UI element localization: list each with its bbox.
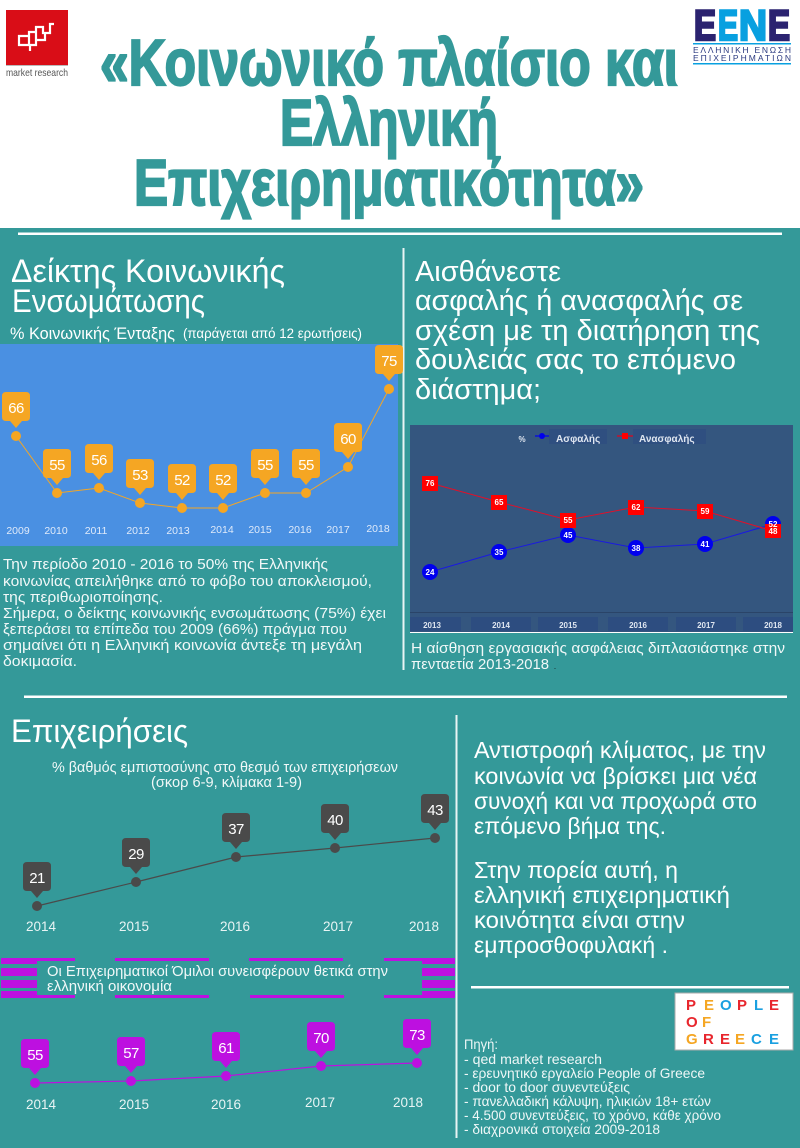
line chart: social inclusion 2009-2018: 2011: [85, 525, 107, 537]
text block: source: - qed market research: [464, 1051, 602, 1067]
line chart: secure vs insecure: 24: [426, 568, 435, 577]
text block: climate reversal: επόμενο βήμα της.: [474, 813, 666, 839]
legend: Ανασφαλής: [639, 434, 695, 445]
text block: source: - διαχρονικά στοιχεία 2009-2018: [464, 1121, 660, 1137]
line chart: business groups 2014-2018: 73: [409, 1027, 425, 1044]
logo: EENE: [693, 2, 791, 64]
line chart: trust 2014-2018: 21: [29, 870, 45, 887]
line chart: business groups 2014-2018: 2017: [305, 1095, 335, 1110]
line chart: social inclusion 2009-2018: 55: [298, 457, 314, 474]
line chart: secure vs insecure: 2018: [764, 621, 782, 630]
text block: climate reversal: Αντιστροφή κλίματος, με την: [474, 737, 766, 763]
logo: People of Greece: O: [686, 1014, 698, 1031]
text block: source: - 4.500 συνεντεύξεις, το χρόνο, κάθε χρόνο: [464, 1107, 721, 1123]
chart subtitle: trust in businesses: [52, 759, 398, 791]
line chart: secure vs insecure: 62: [632, 503, 641, 512]
line chart: secure vs insecure: 38: [632, 544, 641, 553]
logo: People of Greece: E: [735, 1031, 745, 1048]
text block: climate reversal: [474, 737, 766, 958]
logo: People of Greece: O: [720, 997, 732, 1014]
line chart: trust 2014-2018: 2017: [323, 919, 353, 934]
line chart: trust 2014-2018: 40: [327, 812, 343, 829]
line chart: social inclusion 2009-2018: 2009: [6, 525, 30, 537]
title: Επιχειρηματικότητα»: [134, 146, 644, 219]
line chart: social inclusion 2009-2018: 52: [215, 472, 231, 489]
banner: business groups: [1, 958, 455, 998]
logo: EENE: Ν: [739, 2, 767, 50]
text block: social inclusion commentary: ξεπεράσει τα επίπεδα του 2009 (66%) πράγμα που: [3, 621, 347, 638]
caption: job security: [411, 640, 785, 673]
line chart: secure vs insecure: 2017: [697, 621, 715, 630]
caption: job security: .: [554, 662, 556, 671]
logo: People of Greece: G: [686, 1031, 698, 1048]
heading: job security question: Αισθάνεστε: [415, 256, 561, 288]
text block: source: - πανελλαδική κάλυψη, ηλικιών 18+ ετών: [464, 1093, 711, 1109]
line chart: social inclusion 2009-2018: 56: [91, 452, 107, 469]
line chart: trust 2014-2018: 2018: [409, 919, 439, 934]
line chart: social inclusion 2009-2018: 2018: [366, 523, 390, 535]
line chart: trust 2014-2018: 37: [228, 821, 244, 838]
line chart: business groups 2014-2018: 57: [123, 1045, 139, 1062]
line chart: business groups 2014-2018: 2015: [119, 1097, 149, 1112]
text block: climate reversal: εμπροσθοφυλακή .: [474, 932, 668, 958]
heading: businesses: Επιχειρήσεις: [11, 713, 188, 749]
line chart: social inclusion 2009-2018: 55: [49, 457, 65, 474]
line chart: secure vs insecure: 2015: [559, 621, 577, 630]
heading: job security question: ασφαλής ή ανασφαλής σε: [415, 285, 743, 317]
chart subtitle: trust in businesses: (σκορ 6-9, κλίμακα 1-9): [151, 774, 302, 791]
text block: social inclusion commentary: δοκιμασία.: [3, 653, 77, 670]
logo: qed market research: market research: [6, 67, 68, 79]
line chart: social inclusion 2009-2018: 2010: [44, 525, 68, 537]
heading: social inclusion: [11, 253, 285, 319]
caption: job security: πενταετία 2013-2018: [411, 656, 549, 673]
text block: climate reversal: κοινωνία να βρίσκει μια νέα: [474, 763, 757, 789]
logo: People of Greece: E: [704, 997, 714, 1014]
text block: social inclusion commentary: κοινωνίας απειλήθηκε από το φόβο του αποκλεισμού,: [3, 573, 372, 590]
logo: EENE: Ε: [718, 2, 738, 50]
line chart: secure vs insecure: 59: [701, 507, 710, 516]
line chart: social inclusion 2009-2018: 2015: [248, 524, 272, 536]
panel: social inclusion index: [0, 253, 403, 670]
line chart: social inclusion 2009-2018: 53: [132, 467, 148, 484]
text block: source: - ερευνητικό εργαλείο People of Greece: [464, 1065, 705, 1081]
text block: social inclusion commentary: της περιθωριοποίησης.: [3, 589, 163, 606]
line chart: social inclusion 2009-2018: 60: [340, 431, 356, 448]
text block: social inclusion commentary: Την περίοδο 2010 - 2016 το 50% της Ελληνικής: [3, 556, 328, 573]
panel: job security: [410, 256, 793, 673]
text block: source: Πηγή:: [464, 1036, 498, 1052]
heading: job security question: σχέση με τη διατήρηση της: [415, 315, 760, 347]
logo: People of Greece: P: [686, 997, 696, 1014]
line chart: secure vs insecure: 55: [564, 516, 573, 525]
logo: People of Greece: E: [769, 997, 779, 1014]
line chart: trust 2014-2018: 43: [427, 802, 443, 819]
line chart: secure vs insecure: 76: [426, 479, 435, 488]
legend: Ασφαλής: [556, 434, 600, 445]
line chart: secure vs insecure: 65: [495, 498, 504, 507]
logo: People of Greece: R: [703, 1031, 714, 1048]
chart subtitle: % Κοινωνικής Ένταξης: [10, 324, 175, 343]
logo: qed market research: [6, 10, 68, 79]
chart subtitle: trust in businesses: % βαθμός εμπιστοσύνης στο θεσμό των επιχειρήσεων: [52, 759, 398, 776]
logo: People of Greece: E: [769, 1031, 779, 1048]
line chart: social inclusion 2009-2018: 55: [257, 457, 273, 474]
panel: businesses: [1, 713, 455, 1112]
line chart: social inclusion 2009-2018: 2017: [326, 524, 350, 536]
line chart: social inclusion 2009-2018: 2013: [166, 525, 190, 537]
line chart: social inclusion 2009-2018: 2012: [126, 525, 150, 537]
logo: EENE: Ε: [694, 2, 716, 50]
line chart: trust 2014-2018: 29: [128, 846, 144, 863]
text block: social inclusion commentary: σημαίνει ότι η Ελληνική κοινωνία άντεξε τη μεγάλη: [3, 637, 362, 654]
line chart: business groups 2014-2018: [21, 1019, 431, 1112]
line chart: trust 2014-2018: 2016: [220, 919, 250, 934]
legend: [518, 429, 706, 445]
line chart: secure vs insecure: 35: [495, 548, 504, 557]
banner: business groups: ελληνική οικονομία: [47, 978, 172, 995]
chart subtitle: [10, 324, 362, 343]
line chart: social inclusion 2009-2018: 66: [8, 400, 24, 417]
line chart: trust 2014-2018: 2015: [119, 919, 149, 934]
logo: People of Greece: C: [751, 1031, 762, 1048]
logo: People of Greece: [675, 993, 793, 1050]
legend: %: [518, 435, 526, 444]
line chart: social inclusion 2009-2018: [0, 344, 403, 546]
heading: job security question: [415, 256, 760, 406]
text block: source: [464, 1036, 721, 1137]
line chart: secure vs insecure: 2013: [423, 621, 441, 630]
line chart: business groups 2014-2018: 61: [218, 1040, 234, 1057]
logo: People of Greece: P: [737, 997, 747, 1014]
logo: People of Greece: F: [702, 1014, 711, 1031]
line chart: secure vs insecure: 45: [564, 531, 573, 540]
line chart: secure vs insecure: 41: [701, 540, 710, 549]
text block: climate reversal: συνοχή και να προχωρά στο: [474, 788, 757, 814]
text block: climate reversal: κοινότητα είναι στην: [474, 907, 685, 933]
heading: job security question: δουλειάς σας το επόμενο: [415, 344, 736, 376]
heading: job security question: διάστημα;: [415, 374, 541, 406]
line chart: secure vs insecure: [410, 425, 793, 633]
caption: job security: Η αίσθηση εργασιακής ασφάλειας διπλασιάστηκε στην: [411, 640, 785, 657]
line chart: secure vs insecure: 48: [769, 527, 778, 536]
line chart: business groups 2014-2018: 55: [27, 1047, 43, 1064]
line chart: secure vs insecure: 52: [769, 520, 778, 529]
text block: climate reversal: ελληνική επιχειρηματική: [474, 882, 730, 908]
text block: source: - door to door συνεντεύξεις: [464, 1079, 630, 1095]
line chart: trust 2014-2018: 2014: [26, 919, 57, 934]
title: [100, 26, 678, 219]
line chart: social inclusion 2009-2018: 52: [174, 472, 190, 489]
logo: People of Greece: E: [720, 1031, 730, 1048]
heading: social inclusion: Δείκτης Κοινωνικής: [11, 253, 285, 289]
text block: social inclusion commentary: Σήμερα, ο δείκτης κοινωνικής ενσωμάτωσης (75%) έχει: [3, 605, 386, 622]
line chart: secure vs insecure: 2014: [492, 621, 510, 630]
text block: climate reversal: Στην πορεία αυτή, η: [474, 857, 678, 883]
line chart: secure vs insecure: 2016: [629, 621, 647, 630]
line chart: business groups 2014-2018: 2016: [211, 1097, 241, 1112]
title: Ελληνική: [280, 86, 498, 159]
logo: EENE: ΕΠΙΧΕΙΡΗΜΑΤΙΩΝ: [693, 53, 791, 63]
logo: EENE: Ε: [768, 2, 790, 50]
text block: social inclusion commentary: [3, 556, 386, 670]
line chart: social inclusion 2009-2018: 75: [381, 353, 397, 370]
heading: social inclusion: Ενσωμάτωσης: [12, 283, 205, 319]
line chart: business groups 2014-2018: 70: [313, 1030, 329, 1047]
banner: business groups: Οι Επιχειρηματικοί Όμιλοι συνεισφέρουν θετικά στην: [47, 963, 388, 980]
logo: EENE: ΕΛΛΗΝΙΚΗ ΕΝΩΣΗ: [693, 45, 791, 55]
logo: People of Greece: L: [754, 997, 763, 1014]
line chart: social inclusion 2009-2018: 2016: [288, 524, 312, 536]
line chart: business groups 2014-2018: 2018: [393, 1095, 423, 1110]
line chart: business groups 2014-2018: 2014: [26, 1097, 57, 1112]
header band: [0, 0, 800, 228]
line chart: trust 2014-2018: [23, 794, 449, 934]
chart subtitle: (παράγεται από 12 ερωτήσεις): [183, 325, 362, 341]
line chart: social inclusion 2009-2018: 2014: [210, 524, 234, 536]
